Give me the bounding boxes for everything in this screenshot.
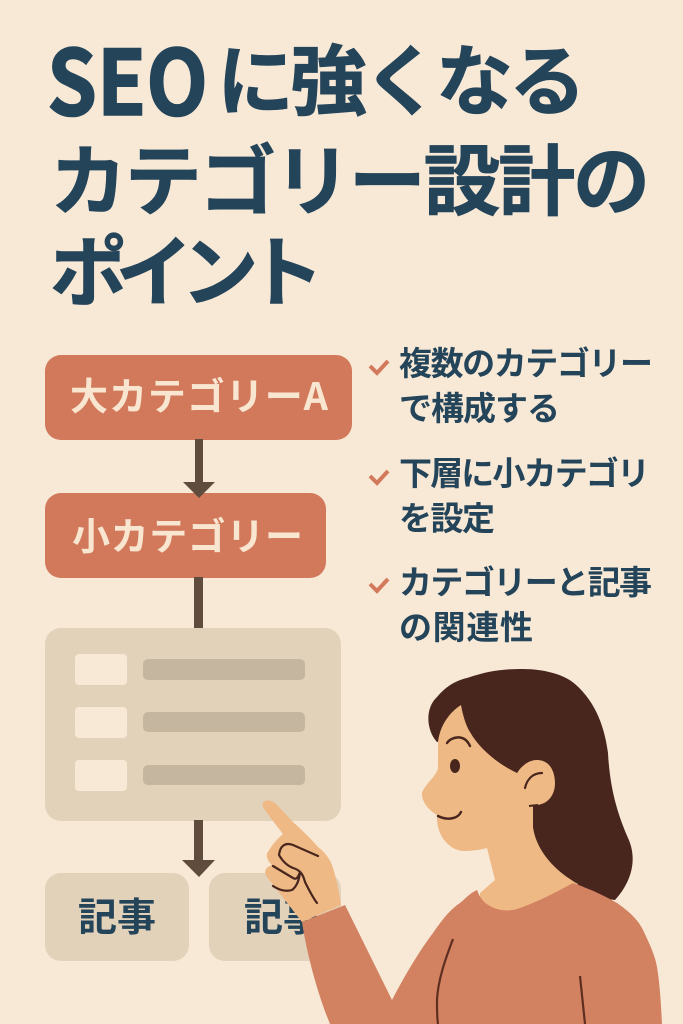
title — [47, 11, 650, 323]
face and neck — [422, 705, 578, 930]
eye — [450, 759, 460, 773]
connector: small category to list panel — [194, 577, 203, 629]
box: small category — [45, 493, 326, 578]
check item 3: の関連性 — [399, 601, 533, 649]
list row 1 — [75, 654, 305, 685]
list row 3 — [75, 760, 305, 791]
hair — [428, 669, 633, 900]
check item 2: を設定 — [399, 492, 495, 540]
title: ポイント — [50, 212, 324, 323]
finger lines — [273, 844, 318, 903]
eyebrow — [447, 737, 470, 746]
arrow: list panel to articles — [182, 820, 215, 877]
sweater fold left — [437, 939, 453, 1024]
mouth — [438, 812, 461, 819]
box: article 1: 記事 — [78, 887, 156, 943]
check item 1: 複数のカテゴリー — [399, 337, 653, 385]
ear — [517, 760, 555, 806]
box: large category A — [45, 355, 352, 440]
sweater fold right — [580, 976, 585, 1024]
title: カテゴリー設計の — [50, 121, 650, 232]
check item 2 — [370, 447, 650, 540]
list row 2 — [75, 707, 305, 738]
illustration: woman pointing — [263, 669, 662, 1024]
title: に強くなる — [217, 21, 586, 132]
arrow: large category to small category — [183, 439, 215, 498]
box: article 2 — [209, 873, 341, 961]
check item 2: 下層に小カテゴリ — [399, 447, 650, 495]
panel: category list — [45, 628, 341, 821]
check item 1: で構成する — [399, 382, 560, 430]
box: small category: 小カテゴリー — [72, 506, 303, 561]
checklist — [370, 337, 653, 649]
sweater — [302, 883, 662, 1024]
box: article 2: 記事 — [244, 887, 322, 943]
check item 1 — [370, 337, 653, 430]
check item 3 — [370, 556, 652, 649]
box: large category A: 大カテゴリーA — [70, 366, 329, 421]
title: SEO — [47, 11, 208, 141]
box: article 1 — [45, 873, 189, 961]
hand — [263, 800, 341, 922]
check item 3: カテゴリーと記事 — [399, 556, 652, 604]
